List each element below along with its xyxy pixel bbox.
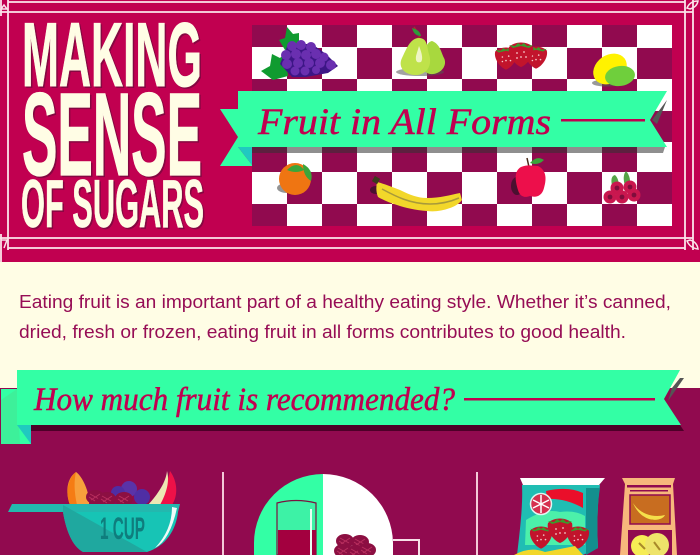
juice and raisins circle [254,474,419,555]
intro text: Eating fruit is an important part of a healthy eating style. Whether it’s canned, [19,292,671,312]
icon: glass of juice [277,500,316,555]
icon: measuring cup with fruit [8,471,180,552]
icon: raisins [334,534,376,555]
icon: cranberries [604,171,640,204]
icon: banana [370,176,462,211]
title: MAKING [24,7,204,108]
title: SENSE [22,70,202,201]
text: OF SUGARS [21,165,204,242]
icon: strawberries [495,42,547,70]
icon: frozen fruit bag [514,478,605,555]
text: OF SUGARS [22,167,206,243]
title: MAKING [22,5,202,106]
intro text [19,292,671,342]
banner: how much fruit is recommended [1,370,684,444]
header panel [0,0,700,262]
icon: dried fruit box [620,478,677,555]
title [21,5,206,243]
divider right [476,472,478,555]
checkerboard [252,25,672,226]
banner heading: Fruit in All Forms [257,102,551,143]
divider left [222,472,224,555]
icon: orange [277,163,312,195]
icon: lemon and lime [587,47,636,91]
icon: pears [396,27,445,76]
intro text: dried, fresh or frozen, eating fruit in all forms contributes to good health. [19,322,626,342]
cup label: 1 CUP [100,511,145,546]
banner heading: How much fruit is recommended? [33,382,455,418]
icon: grapes [261,27,338,80]
measure box outline [393,540,419,555]
lower panel [0,388,700,555]
title: SENSE [24,72,204,202]
icon: corner ornaments [1,1,698,249]
banner: fruit in all forms [220,91,667,166]
icon: apple [511,158,546,197]
